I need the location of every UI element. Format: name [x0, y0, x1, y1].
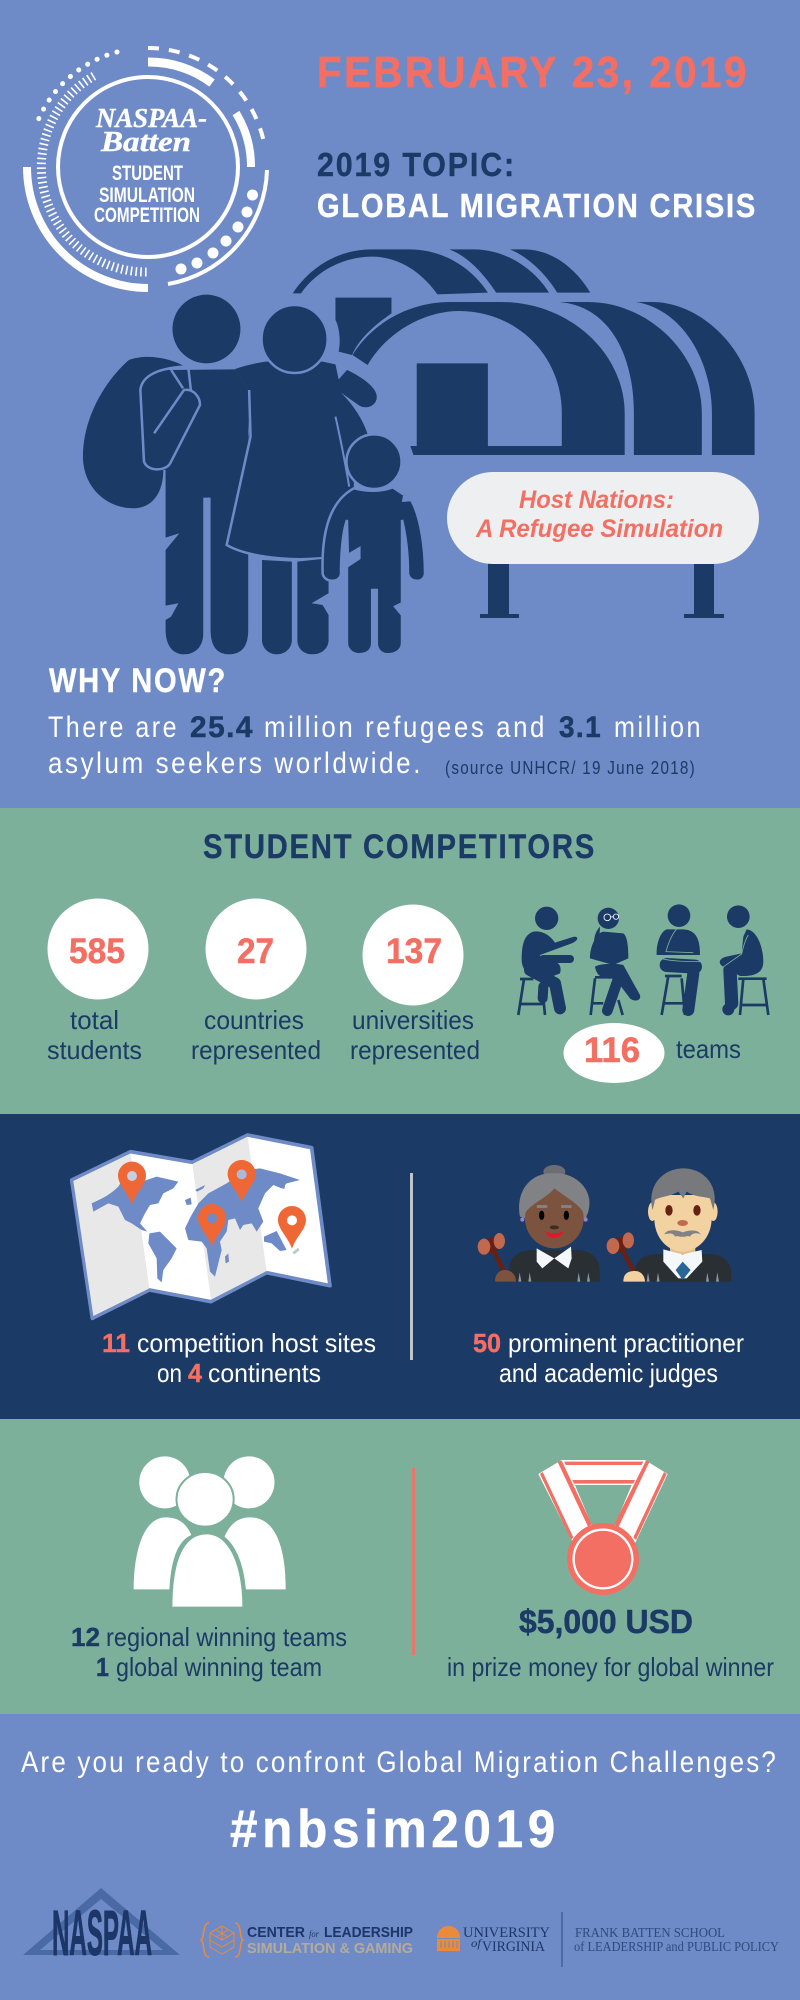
panel: call to action footer [0, 1714, 800, 2000]
sign: Host Nations: A Refugee Simulation [475, 515, 723, 543]
text block: refugee statistics: 3.1 [559, 711, 602, 744]
topic label: 2019 TOPIC: [317, 146, 516, 183]
panel: host sites and judges [0, 1114, 800, 1419]
text: winning teams: regional winning teams [106, 1622, 347, 1652]
text: winning teams [71, 1622, 347, 1682]
text: host sites: competition host sites [137, 1328, 376, 1358]
panel: student competitors [0, 808, 800, 1114]
logo: Frank Batten School [574, 1926, 779, 1955]
text: judges: and academic judges [499, 1358, 718, 1388]
stat: total students: students [47, 1035, 142, 1065]
logo: Frank Batten School: of LEADERSHIP and PUBLIC POLICY [574, 1940, 779, 1955]
logo: University of Virginia: VIRGINIA [482, 1939, 545, 1955]
text: winning teams: 1 [96, 1652, 109, 1682]
text: host sites: on [157, 1358, 182, 1388]
stat: total students: 585 [69, 932, 125, 971]
badge: competition seal: Batten [100, 127, 191, 158]
text: prize money: $5,000 USD [519, 1603, 693, 1640]
stat: countries represented: 27 [237, 932, 274, 971]
text block: refugee statistics: million [614, 711, 703, 744]
text: host sites: 4 [188, 1358, 203, 1388]
panel: hero background [0, 0, 800, 808]
illustration: refugee camp tents and family [83, 249, 755, 654]
stat: universities represented: 137 [386, 932, 442, 971]
text: host sites: 11 [102, 1328, 130, 1358]
logo: University of Virginia: of [471, 1936, 483, 1950]
text block: refugee statistics: million refugees and [264, 711, 547, 744]
text: judges: prominent practitioner [508, 1328, 744, 1358]
text: prize money [447, 1603, 774, 1682]
sign: Host Nations [447, 472, 759, 618]
icon: four seated people [518, 904, 768, 1015]
text block: refugee statistics: (source UNHCR/ 19 June 2018) [445, 758, 696, 778]
text: NASPAA [52, 1897, 152, 1969]
logo: Center for Leadership: SIMULATION & GAMING [247, 1940, 413, 1957]
badge: competition seal: COMPETITION [94, 204, 200, 227]
text: judges: 50 [473, 1328, 501, 1358]
text: host sites [102, 1328, 376, 1388]
sign: Host Nations: Host Nations: [519, 486, 674, 514]
logo: Center for Leadership: CENTER [247, 1924, 305, 1941]
text: judges [473, 1328, 744, 1388]
heading: why now: WHY NOW? [49, 662, 227, 700]
icon: group of three people [134, 1456, 286, 1607]
stat: universities represented: universities [352, 1005, 474, 1035]
logo: Center for Leadership [201, 1923, 413, 1957]
stat: teams [564, 1023, 741, 1083]
logo: University of Virginia [437, 1925, 550, 1955]
stat: universities represented [350, 904, 480, 1065]
text block: refugee statistics: asylum seekers worldwide. [48, 747, 423, 780]
date heading: FEBRUARY 23, 2019 [317, 48, 749, 97]
badge: competition seal: STUDENT [112, 162, 183, 185]
text block: refugee statistics: There are [48, 711, 179, 744]
stat: universities represented: represented [350, 1035, 480, 1065]
logo: Center for Leadership: for [309, 1929, 319, 1939]
stat: countries represented: represented [191, 1035, 321, 1065]
stat: teams: 116 [584, 1031, 640, 1070]
logo: University of Virginia: UNIVERSITY [463, 1925, 550, 1941]
stat: countries represented: countries [204, 1005, 304, 1035]
stat: total students: total [70, 1005, 119, 1035]
text: hashtag: #nbsim2019 [230, 1800, 560, 1859]
panel: winners and prize [0, 1419, 800, 1714]
text block: refugee statistics [48, 711, 703, 780]
icon: medal [538, 1460, 668, 1595]
badge: competition seal [27, 48, 267, 288]
stat: total students [47, 898, 148, 1065]
logo: NASPAA [23, 1888, 180, 1969]
badge: competition seal: NASPAA- [95, 103, 207, 133]
icon: two judges with gavels [478, 1165, 731, 1282]
logo: Frank Batten School: FRANK BATTEN SCHOOL [575, 1926, 725, 1941]
stat: countries represented [191, 898, 321, 1065]
badge: competition seal: SIMULATION [99, 184, 195, 207]
text: winning teams: global winning team [116, 1652, 322, 1682]
text block: refugee statistics: 25.4 [190, 711, 254, 744]
logo: Center for Leadership: LEADERSHIP [324, 1924, 413, 1941]
heading: student competitors: STUDENT COMPETITORS [203, 828, 596, 866]
stat: teams: teams [676, 1034, 741, 1064]
icon: folded world map with pins [72, 1135, 330, 1318]
text: host sites: continents [208, 1358, 321, 1388]
text: winning teams: 12 [71, 1622, 100, 1652]
